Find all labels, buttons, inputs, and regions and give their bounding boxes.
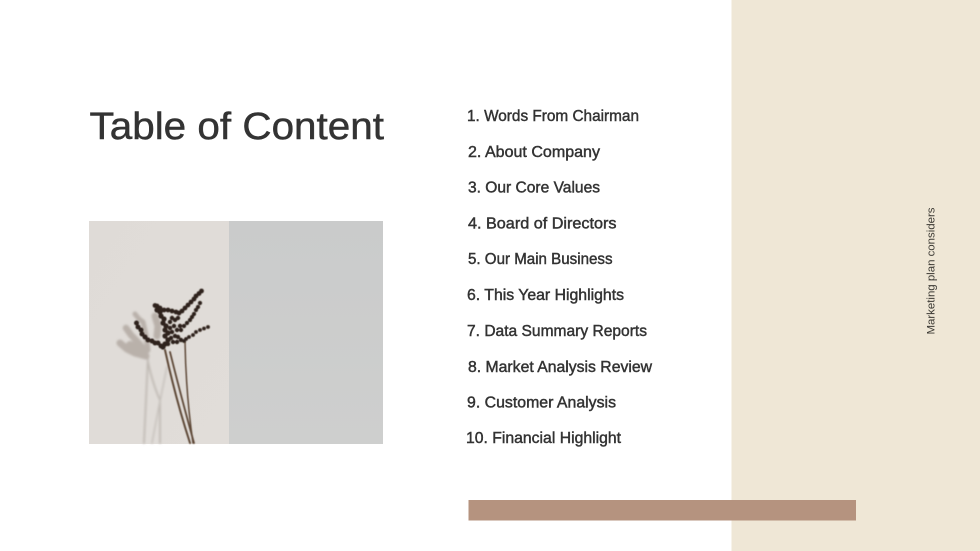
accent bar [468, 500, 856, 520]
item 10: 10. Financial Highlight [466, 430, 622, 447]
photo wall: left [89, 221, 229, 444]
item 3: 3. Our Core Values [468, 180, 600, 196]
item 1: 1. Words From Chairman [467, 108, 639, 125]
item 8: 8. Market Analysis Review [468, 359, 652, 376]
item 2: 2. About Company [468, 144, 600, 161]
plant seed heads [136, 291, 208, 347]
item 5: 5. Our Main Business [468, 251, 612, 268]
vertical side caption: Marketing plan considers [926, 207, 938, 334]
table of contents list [466, 108, 652, 447]
item 7: 7. Data Summary Reports [467, 323, 647, 340]
item 9: 9. Customer Analysis [467, 394, 616, 412]
item 4: 4. Board of Directors [468, 216, 616, 232]
title: Table of Content [90, 106, 384, 148]
photo wall: right [229, 221, 383, 444]
photo: dried plant against a two-tone wall [89, 221, 383, 444]
plant stems [165, 342, 194, 443]
item 6: 6. This Year Highlights [467, 287, 624, 304]
plant shadow [120, 314, 167, 443]
panel: beige side panel [732, 0, 980, 551]
